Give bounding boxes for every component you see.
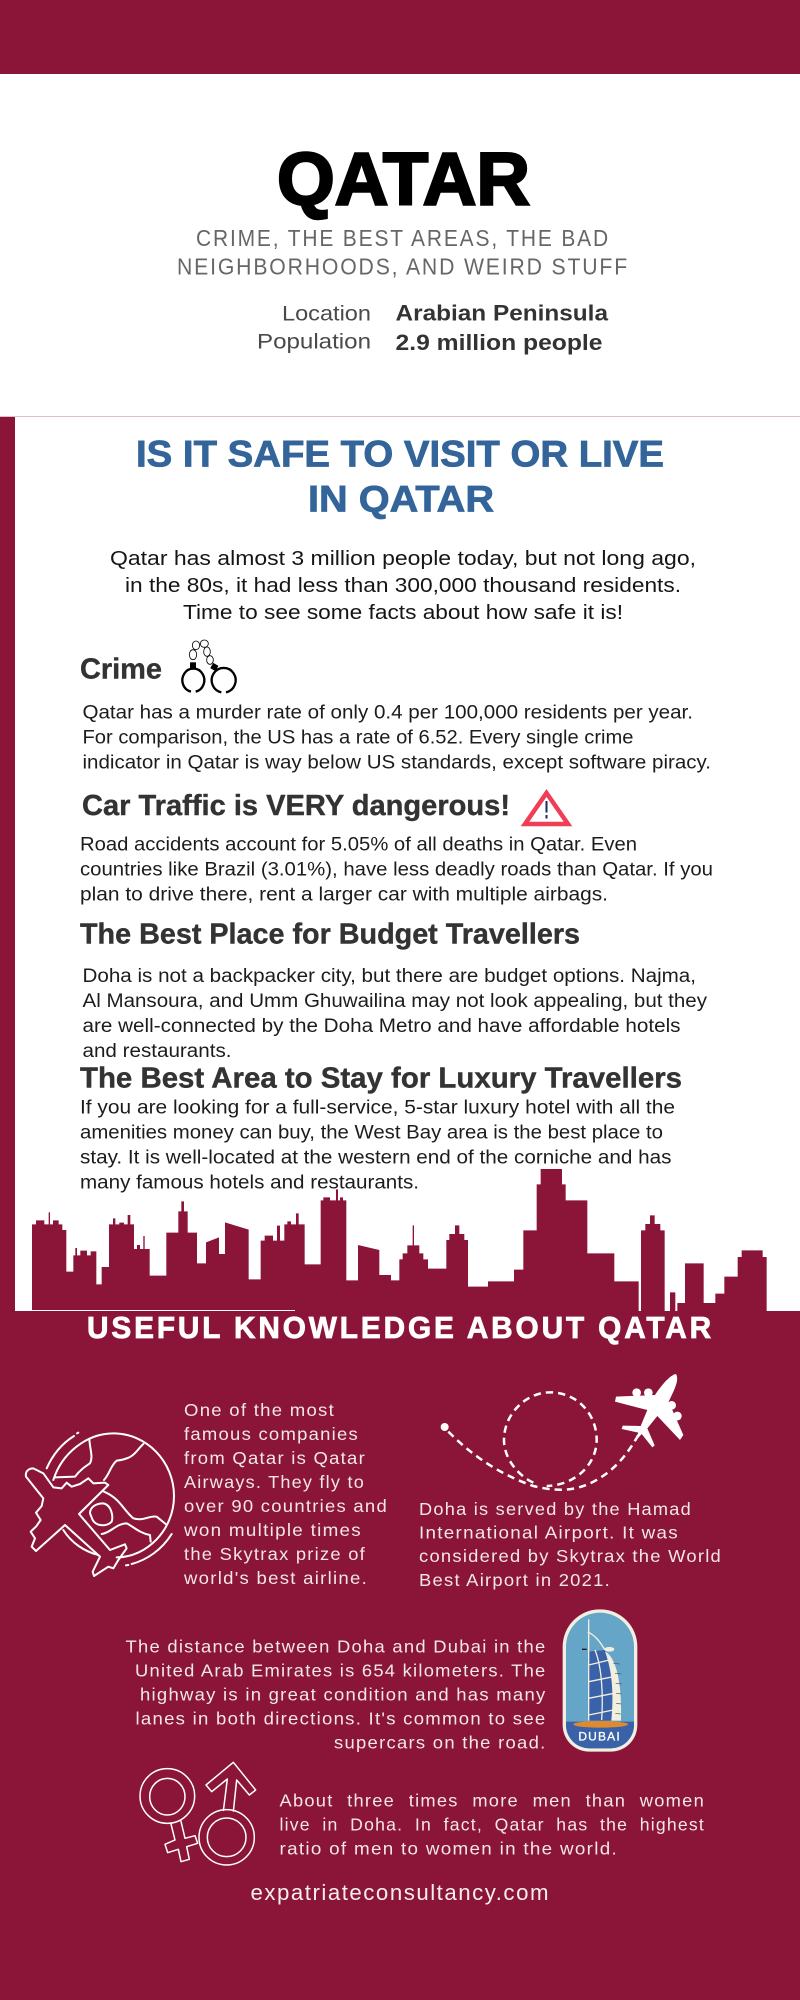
location fact <box>282 300 609 326</box>
city skyline <box>32 1169 767 1313</box>
airline text: One of the most <box>184 1400 335 1420</box>
location fact: Location <box>282 302 371 326</box>
airport text: International Airport. It was <box>419 1522 679 1542</box>
subtitle: NEIGHBORHOODS, AND WEIRD STUFF <box>177 254 629 280</box>
airline text <box>183 1400 388 1588</box>
airline text: world's best airline. <box>183 1568 368 1588</box>
subtitle: CRIME, THE BEST AREAS, THE BAD <box>196 225 610 251</box>
icon: Dubai badge: DUBAI <box>578 1729 622 1743</box>
useful knowledge heading: USEFUL KNOWLEDGE ABOUT QATAR <box>87 1310 714 1345</box>
intro paragraph <box>110 548 696 624</box>
airline text: famous companies <box>184 1424 359 1444</box>
icon: handcuffs <box>182 640 236 692</box>
safety section heading: IN QATAR <box>308 478 494 520</box>
airport text <box>419 1499 722 1590</box>
airport text: considered by Skytrax the World <box>419 1546 722 1566</box>
car traffic paragraph: Road accidents account for 5.05% of all deaths in Qatar. Even <box>80 834 637 856</box>
airport text: Doha is served by the Hamad <box>419 1499 692 1519</box>
budget travellers paragraph: and restaurants. <box>82 1041 232 1062</box>
airline text: from Qatar is Qatar <box>184 1448 366 1468</box>
distance text: The distance between Doha and Dubai in the <box>126 1636 546 1656</box>
car traffic heading: Car Traffic is VERY dangerous! <box>82 790 510 822</box>
header block <box>177 138 629 355</box>
safety section heading: IS IT SAFE TO VISIT OR LIVE <box>136 434 664 474</box>
airline text: the Skytrax prize of <box>184 1544 366 1564</box>
luxury travellers paragraph: If you are looking for a full-service, 5-star luxury hotel with all the <box>80 1098 675 1118</box>
subtitle <box>177 225 629 280</box>
budget travellers heading: The Best Place for Budget Travellers <box>80 918 580 950</box>
budget travellers paragraph <box>82 966 708 1062</box>
icon: Dubai badge <box>563 1609 637 1752</box>
distance text: supercars on the road. <box>334 1732 546 1752</box>
budget travellers paragraph: Al Mansoura, and Umm Ghuwailina may not look appealing, but they <box>82 991 708 1012</box>
crime paragraph: For comparison, the US has a rate of 6.52. Every single crime <box>82 728 634 748</box>
gender ratio text: live in Doha. In fact, Qatar has the highest <box>280 1814 705 1834</box>
luxury travellers paragraph: many famous hotels and restaurants. <box>80 1172 419 1194</box>
car traffic paragraph <box>80 834 713 906</box>
icon: warning triangle <box>525 793 568 824</box>
airline text: Airways. They fly to <box>184 1472 365 1492</box>
population fact: Population <box>257 330 371 354</box>
car traffic paragraph: countries like Brazil (3.01%), have less deadly roads than Qatar. If you <box>80 860 713 880</box>
gender ratio text: About three times more men than women <box>280 1790 705 1810</box>
safety section heading <box>136 434 664 520</box>
crime paragraph: Qatar has a murder rate of only 0.4 per 100,000 residents per year. <box>82 702 693 724</box>
airport text: Best Airport in 2021. <box>419 1570 611 1590</box>
airline text: won multiple times <box>183 1520 362 1540</box>
airline text: over 90 countries and <box>184 1496 388 1516</box>
title: QATAR <box>277 138 530 220</box>
gender ratio text: ratio of men to women in the world. <box>280 1838 618 1858</box>
icon: plane with dashed route <box>441 1374 683 1490</box>
crime paragraph <box>82 702 711 774</box>
budget travellers paragraph: Doha is not a backpacker city, but there are budget options. Najma, <box>82 966 696 987</box>
left side bar <box>0 417 15 1317</box>
luxury travellers paragraph: amenities money can buy, the West Bay area is the best place to <box>80 1122 663 1144</box>
distance text: highway is in great condition and has many <box>140 1684 546 1704</box>
budget travellers paragraph: are well-connected by the Doha Metro and have affordable hotels <box>82 1016 680 1037</box>
website footer: expatriateconsultancy.com <box>250 1880 550 1905</box>
luxury travellers paragraph: stay. It is well-located at the western end of the corniche and has <box>80 1148 671 1168</box>
distance text: lanes in both directions. It's common to see <box>136 1708 546 1728</box>
icon: plane and globe <box>26 1433 174 1576</box>
population fact <box>257 330 602 355</box>
intro paragraph: Time to see some facts about how safe it is! <box>183 602 623 624</box>
distance text <box>126 1636 546 1752</box>
luxury travellers heading: The Best Area to Stay for Luxury Travellers <box>80 1062 682 1094</box>
icon: gender symbols <box>140 1762 256 1865</box>
distance text: United Arab Emirates is 654 kilometers. The <box>135 1660 546 1680</box>
crime paragraph: indicator in Qatar is way below US standards, except software piracy. <box>82 752 711 774</box>
lower maroon panel <box>0 1311 800 2000</box>
intro paragraph: in the 80s, it had less than 300,000 thousand residents. <box>125 575 681 597</box>
car traffic paragraph: plan to drive there, rent a larger car with multiple airbags. <box>80 884 608 906</box>
crime heading: Crime <box>80 654 162 686</box>
top banner <box>0 0 800 74</box>
gender ratio text <box>280 1790 705 1858</box>
location fact: Arabian Peninsula <box>396 300 609 326</box>
population fact: 2.9 million people <box>396 330 602 355</box>
intro paragraph: Qatar has almost 3 million people today, but not long ago, <box>110 548 696 570</box>
luxury travellers paragraph <box>80 1098 675 1194</box>
